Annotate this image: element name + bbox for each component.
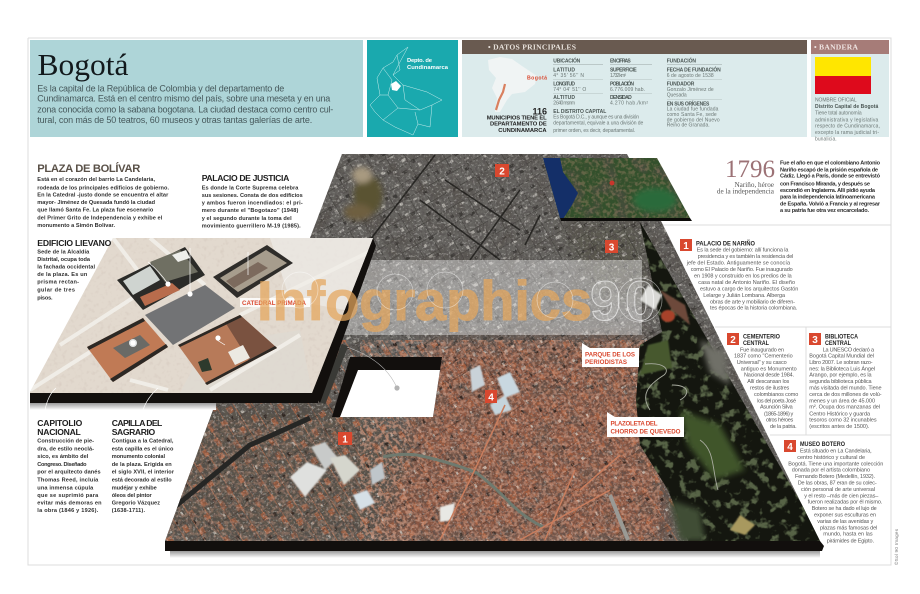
municipalities callout: 116 (532, 106, 547, 116)
column: en cifras: SUPERFICIE (610, 67, 637, 73)
text: Capitolio Nacional: CAPITOLIO (37, 418, 83, 428)
entry 1: Palacio de Nariño: PALACIO DE NARIÑO (696, 240, 755, 248)
text: Capilla del Sagrario: el siglo XVII, el interior (112, 470, 175, 476)
caption: de la independencia (717, 188, 775, 196)
callout: Plazoleta del Chorro de Quevedo (607, 412, 684, 437)
labels: aerial badges (338, 164, 618, 446)
body: Está en el corazón del barrio La Candelaria, (37, 177, 155, 183)
entry 4: Museo Botero: Está situado en La Candelaria, (800, 448, 872, 454)
watermark band (337, 260, 642, 335)
text: Plaza de Bolívar (37, 162, 169, 229)
body: Cádiz. Llegó a París, donde se entrevistó (780, 174, 881, 180)
entry 1: Palacio de Nariño: estuvo a cargo de los arquitectos Gastón (700, 286, 798, 292)
entry 4: Museo Botero: Bogotá. Tiene una importante colección (788, 461, 883, 467)
caption (717, 181, 775, 196)
inset: Plaza de Bolívar aerial (25, 235, 376, 410)
entry 3: Biblioteca Central: Libro 2007. Le sobran razo- (809, 360, 873, 366)
column: fundacion: La ciudad fue fundada (667, 106, 719, 112)
caption: Nariño, héroe (734, 181, 774, 189)
text: Capitolio Nacional: dra, de estilo neoclá- (37, 446, 94, 452)
column: en cifras: 4.270 hab./km² (610, 100, 648, 106)
entry 2: Cementerio Central: Universal" y su casco (737, 360, 787, 366)
text: Capilla del Sagrario: (1638-1711). (112, 508, 145, 514)
entry 1: Palacio de Nariño: casa natal de Antonio Nariño. El diseño (698, 280, 795, 286)
text: Palacio de Justicia: mero durante el "Bogotazo" (1948) (202, 208, 299, 214)
entry 1: Palacio de Nariño: como El Palacio de Nariño. Fue inaugurado (691, 267, 793, 273)
callout: Parque de los Periodistas (582, 343, 639, 367)
entry 2: Cementerio Central: Allí descansan los (747, 379, 790, 385)
column: en cifras: 1.732 km² (610, 73, 626, 79)
entry 2: Cementerio Central: antiguo es Monumento (741, 366, 797, 372)
text: Edificio Lievano: Distrital, ocupa toda (37, 257, 91, 263)
entry 3: Biblioteca Central: más visitada del mundo. Tiene (809, 385, 882, 391)
body: mayor- Jiménez de Quesada fundó la ciudad (37, 200, 156, 206)
entry 2: Cementerio Central: CEMENTERIO (743, 334, 780, 340)
text: Capilla del Sagrario: óleos del pintor (112, 493, 153, 499)
title: Bogotá (38, 47, 129, 82)
text: Capitolio Nacional: una inmensa cúpula (37, 485, 94, 491)
entry 3: Biblioteca Central: CENTRAL (825, 340, 851, 347)
body: En la Catedral -justo donde se encuentra el altar (37, 193, 169, 199)
text: Capitolio Nacional: la obra (1846 y 1926). (37, 508, 99, 514)
body: que llamó Santa Fe. La plaza fue escenario (37, 207, 154, 213)
column: fundacion: de gobierno del Nuevo (667, 117, 720, 123)
entry 4: Museo Botero: fueron realizadas por él mismo. (808, 500, 883, 506)
body: escondió en Inglaterra. Allí pidió ayuda (780, 188, 876, 194)
column: ubicacion: LATITUD (553, 67, 575, 73)
municipalities callout: CUNDINAMARCA (498, 128, 547, 134)
entry 1: Palacio de Nariño: en 1908 y construido en los predios de la (694, 273, 793, 279)
body: Fue el año en que el colombiano Antonio (780, 161, 881, 167)
panel heading: • BANDERA (814, 42, 859, 52)
intro text: Cundinamarca. Está en el centro mismo del país, sobre una meseta y en una (37, 94, 330, 104)
map label: Depto. de (407, 58, 433, 64)
entry 3: Biblioteca Central: Arango, por ejemplo, es la (809, 373, 873, 379)
body: de España. Volvió a Francia y al regresar (780, 201, 881, 207)
municipalities callout: DEPARTAMENTO DE (490, 122, 547, 128)
column: ubicacion (553, 56, 603, 106)
intro text: Es la capital de la República de Colombia y del departamento de (37, 83, 284, 93)
entry 2: Cementerio Central: Asunción Silva (760, 405, 794, 411)
body: monumento a Simón Bolívar. (37, 223, 115, 229)
entry 2: Cementerio Central: 1837 como "Cementerio (734, 354, 793, 360)
panel: bandera (811, 40, 889, 142)
flag text: bunalicia. (815, 136, 837, 142)
column: fundacion: como Santa Fe, sede (667, 112, 717, 118)
entry 4: Museo Botero: Fernando Botero (Medellín, 1932). (795, 474, 875, 480)
body: Nariño escapó de la prisión española de (780, 167, 878, 173)
text: Capitolio Nacional: Thomas Reed, incluía (37, 477, 99, 483)
flag text: Distrito Capital de Bogotá (815, 104, 879, 110)
credit: ©Sol 90 Images (893, 528, 899, 565)
text: Capilla del Sagrario: Gregorio Vázquez (112, 500, 160, 506)
entry 2: Cementerio Central: CENTRAL (743, 340, 769, 347)
street bands (30, 238, 373, 390)
Catedral block (178, 315, 277, 385)
body: a su patria fue otra vez encarcelado. (780, 208, 869, 214)
panel: datos principales (462, 40, 807, 137)
distrito capital note: EL DISTRITO CAPITAL (553, 109, 606, 115)
distrito capital note: departamental, equivale a una división de (553, 121, 644, 127)
text: Capitolio Nacional: NACIONAL (37, 427, 81, 437)
watermark: Infographics (257, 269, 592, 332)
column: en cifras: 6.776.009 hab. (610, 87, 645, 93)
entry 1: Palacio de Nariño: presidencia y es también la residencia del (698, 254, 793, 260)
text: Capilla del Sagrario: CAPILLA DEL (112, 418, 162, 428)
callout: Parque de los Periodistas: PARQUE DE LOS (585, 352, 635, 358)
column: fundacion: EN SUS ORÍGENES (667, 99, 710, 107)
number badge: 4 (787, 442, 793, 453)
entry 3: Biblioteca Central (809, 333, 882, 430)
entry 2: Cementerio Central: colombianos como (754, 392, 798, 398)
column: fundacion: 6 de agosto de 1538 (667, 73, 714, 79)
panel: locator map (367, 40, 458, 137)
park at upper left (344, 167, 382, 220)
inset: regional satellite map (540, 155, 695, 221)
text: Palacio de Justicia: PALACIO DE JUSTICIA (202, 173, 289, 183)
entry 2: Cementerio Central: restos de ilustres (750, 385, 790, 391)
column: ubicacion: LONGITUD (553, 81, 575, 87)
text: Capitolio Nacional: por el arquitecto danés (37, 470, 101, 476)
year: 1796 (725, 156, 775, 183)
entry 1: Palacio de Nariño: Es la sede del gobierno: allí funciona la (697, 247, 789, 253)
column: ubicacion: ALTITUD (553, 95, 575, 101)
entry 1: Palacio de Nariño: tes épocas de la historia colombiana. (710, 306, 798, 312)
body: para la independencia latinoamericana (780, 195, 876, 201)
entry 2: Cementerio Central: los del poeta José (757, 398, 796, 404)
map of Colombia (370, 47, 442, 135)
text: Edificio Lievano: prisma rectan- (37, 280, 79, 286)
column: fundacion: Gonzalo Jiménez de (667, 87, 714, 93)
text: Edificio Lievano (37, 238, 112, 301)
municipalities callout (487, 106, 547, 134)
intro text: tural, con más de 50 teatros, 60 museos y otras tantas galerías de arte. (37, 115, 312, 125)
aerial photo of Bogotá (160, 150, 830, 558)
text: Capitolio Nacional: sico, es ámbito del (37, 454, 89, 460)
entry 1: Palacio de Nariño: obras de arte y mobiliario de diferen- (710, 299, 795, 305)
column: en cifras: POBLACIÓN (610, 79, 634, 87)
text: Edificio Lievano: EDIFICIO LIEVANO (37, 238, 112, 248)
entry 4: Museo Botero: De las obras, 87 eran de su colec- (798, 480, 877, 486)
callout: Plazoleta del Chorro de Quevedo: CHORRO DE QUEVEDO (610, 428, 681, 436)
text: Palacio de Justicia (202, 173, 303, 230)
column: ubicacion: UBICACIÓN (553, 56, 581, 64)
labels: aerial badges: 4 (488, 392, 494, 404)
column: ubicacion: 74° 04' 51'' O (553, 87, 586, 93)
callout: Plazoleta del Chorro de Quevedo: PLAZOLETA DEL (610, 420, 658, 428)
dark streets (370, 155, 540, 260)
flag (815, 57, 871, 94)
leader lines and dots (45, 248, 248, 410)
entry 3: Biblioteca Central: Centro Histórico y guarda (809, 411, 871, 417)
body: del Primer Grito de Independencia y exhibe el (37, 215, 163, 221)
entry 4: Museo Botero: pirámides de Egipto. (827, 538, 874, 544)
entry 3: Biblioteca Central: La UNESCO declaró a (823, 347, 875, 353)
ring road and canal (165, 345, 628, 540)
map of Cundinamarca (488, 57, 547, 112)
column: en cifras: DENSIDAD (610, 95, 632, 101)
entry 3: Biblioteca Central: menes y un área de 45.000 (809, 398, 875, 404)
map label: Cundinamarca (407, 65, 449, 71)
entry 4: Museo Botero: varias de las avenidas y (817, 519, 874, 525)
entry 1: Palacio de Nariño (680, 239, 798, 312)
entry 4: Museo Botero: MUSEO BOTERO (800, 441, 845, 448)
text: Palacio de Justicia: y ambos fueron incendiados: el pri- (202, 201, 303, 207)
intro text (37, 83, 333, 125)
entry 3: Biblioteca Central: nes: la Biblioteca Luis Ángel (809, 365, 875, 372)
entry 1: Palacio de Nariño: Lelarge y Julián Lombana. Alberga (703, 293, 786, 299)
map of Cundinamarca: Bogotá (527, 76, 547, 82)
map label (407, 58, 449, 71)
callout: Catedral Primada: CATEDRAL PRIMADA (242, 300, 307, 307)
entry 2: Cementerio Central: (1865-1896) y (764, 411, 794, 417)
callout: Parque de los Periodistas: PERIODISTAS (585, 359, 627, 366)
forest hills (625, 222, 825, 545)
entry 4: Museo Botero: plazas más famosas del (820, 525, 877, 531)
text: Palacio de Justicia: movimiento guerrillero M-19 (1985). (202, 224, 301, 230)
municipalities callout: MUNICIPIOS TIENE EL (487, 116, 547, 122)
entry 2: Cementerio Central: otros héroes (766, 418, 794, 424)
text: Capilla del Sagrario: monumento colonial (112, 454, 165, 460)
entry 4: Museo Botero: exponer sus esculturas en (814, 512, 876, 518)
labels: aerial badges: 1 (342, 434, 348, 446)
entry 3: Biblioteca Central: Bogotá Capital Mundial del (809, 354, 874, 360)
palace complex near hills (640, 285, 690, 325)
text: Edificio Lievano: pisos. (37, 295, 53, 301)
entry 3: Biblioteca Central: cerca de dos millones de volú- (809, 392, 882, 398)
body: rodeada de los principales edificios de gobierno. (37, 185, 169, 191)
panel heading: • DATOS PRINCIPALES (488, 42, 576, 52)
column: ubicacion: 2.640 msnm (553, 100, 575, 106)
heading: PLAZA DE BOLÍVAR (37, 162, 140, 175)
entry 3: Biblioteca Central: segunda biblioteca pública (809, 379, 873, 385)
text: Capilla del Sagrario: SAGRARIO (112, 427, 156, 437)
panel: intro (30, 40, 363, 137)
entry 1: Palacio de Nariño: jefe del Estado. Antiguamente se conocía (686, 260, 791, 266)
flag text: Tiene total autonomía (815, 110, 862, 116)
flag text: excepto la rama judicial tri- (815, 130, 879, 136)
column: fundacion: FUNDACIÓN (667, 56, 696, 64)
text: Palacio de Justicia: Es donde la Corte Suprema celebra (202, 185, 299, 191)
watermark: 90 (590, 269, 656, 332)
entry 4: Museo Botero: y el resto –más de cien piezas– (804, 493, 879, 499)
entry 4: Museo Botero: centro histórico y cultural de (797, 455, 865, 461)
hole cut-out with leader (332, 347, 442, 417)
column: fundacion: FUNDADOR (667, 81, 695, 87)
flag text: NOMBRE OFICIAL (815, 97, 857, 103)
text: Capilla del Sagrario (112, 418, 175, 514)
entry 4: Museo Botero (784, 440, 883, 544)
text: Edificio Lievano: Sede de la Alcaldía (37, 250, 90, 256)
text: Capitolio Nacional: que se suprimió para (37, 493, 99, 499)
text: Capilla del Sagrario: esta capilla es el único (112, 446, 174, 452)
plaza square (145, 285, 235, 345)
entry 4: Museo Botero: donada por el artista colombiano (792, 468, 870, 474)
body (37, 177, 169, 229)
number badge: 1 (683, 241, 689, 252)
entry 4: Museo Botero: mundo, hasta en las (823, 532, 873, 538)
text: Capilla del Sagrario: Contigua a la Catedral, (112, 439, 174, 445)
entry 4: Museo Botero: ción personal de arte universal (801, 487, 875, 493)
number badge: 3 (812, 335, 818, 346)
flag text (815, 97, 880, 142)
distrito capital note (553, 109, 644, 134)
labels: aerial badges: 3 (609, 242, 615, 254)
text: Capilla del Sagrario: de la plaza. Erigida en (112, 462, 172, 468)
text: Capitolio Nacional: Congreso. Diseñado (37, 462, 87, 468)
column: en cifras (610, 58, 652, 106)
callout: 1796 (717, 156, 881, 214)
body: con Francisco Miranda, y después se (780, 181, 870, 187)
distrito capital note: Es Bogotá D.C., y aunque es una división (553, 115, 639, 121)
entry 2: Cementerio Central (727, 333, 798, 430)
text: Capilla del Sagrario: está decorado al estilo (112, 477, 172, 483)
text: Capilla del Sagrario: mudéjar y exhibe (112, 485, 157, 491)
flag text: respecto de Cundinamarca, (815, 124, 880, 130)
column: ubicacion: 4° 35' 56'' N (553, 73, 584, 79)
text: Palacio de Justicia: y el segundo durante la toma del (202, 216, 292, 222)
entry 3: Biblioteca Central: tesoros como 32 incunables (809, 418, 877, 424)
text: Capitolio Nacional: evitar más demoras en (37, 500, 102, 506)
entry 3: Biblioteca Central: (escritos antes de 1500). (809, 424, 870, 430)
entry 3: Biblioteca Central: m². Ocupa dos manzanas del (809, 405, 880, 411)
government buildings (290, 365, 520, 522)
Palacio de Justicia (213, 245, 293, 298)
entry 3: Biblioteca Central: BIBLIOTECA (825, 334, 858, 340)
entry 2: Cementerio Central: Nacional desde 1984. (744, 373, 794, 379)
text: Edificio Lievano: gular de tres (37, 287, 75, 293)
entry 4: Museo Botero: Botero se ha dado el lujo de (812, 506, 877, 512)
entry 2: Cementerio Central: Fue inaugurado en (740, 347, 784, 353)
text: Edificio Lievano: de la plaza. Es un (37, 272, 88, 278)
aerial base shadow (170, 551, 820, 558)
column: fundacion: FECHA DE FUNDACIÓN (667, 65, 721, 73)
column: fundacion: Quesada (667, 92, 687, 98)
text: Capitolio Nacional: Construcción de pie- (37, 439, 94, 445)
column: fundacion (667, 56, 722, 128)
Edificio Lievano (117, 247, 205, 310)
Capitolio (87, 318, 168, 382)
intro text: zona conocida como la sabana bogotana. La ciudad destaca como centro cul- (37, 104, 333, 114)
labels: aerial badges: 2 (499, 166, 505, 178)
text: Capitolio Nacional (37, 418, 102, 514)
entry 2: Cementerio Central: de la patria. (770, 424, 797, 430)
text: Edificio Lievano: la fachada occidental (37, 265, 95, 271)
column: en cifras: EN CIFRAS (610, 58, 631, 64)
flag text: administrativa y legislativa (815, 117, 879, 123)
text: Palacio de Justicia: sus sesiones. Consta de dos edificios (202, 193, 303, 199)
number badge: 2 (730, 335, 736, 346)
body (780, 161, 881, 214)
distrito capital note: primer orden, es decir, departamental. (553, 128, 635, 134)
column: fundacion: Reino de Granada. (667, 122, 710, 128)
